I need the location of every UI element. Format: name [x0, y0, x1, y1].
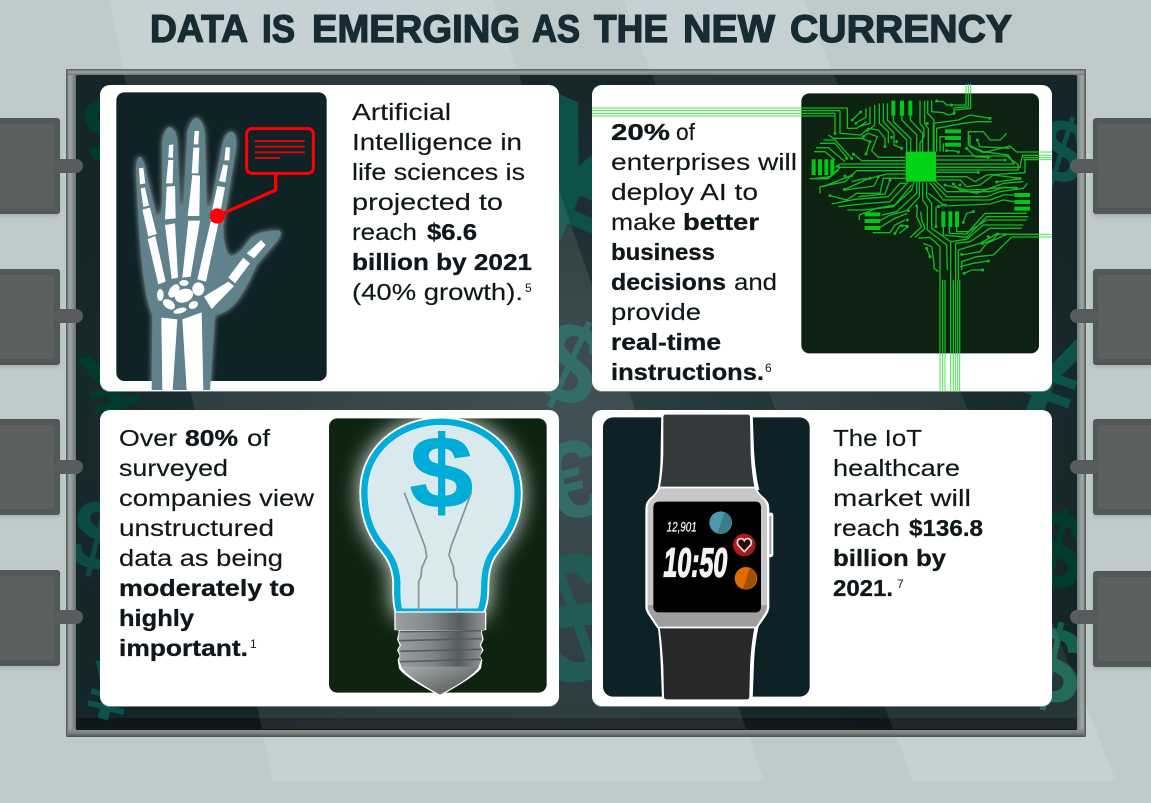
text: unstructured data: data as being [119, 545, 283, 571]
title: THE [594, 8, 668, 51]
text: AI in life sciences: (40% growth). [352, 279, 523, 305]
text: unstructured data: highly [119, 605, 194, 631]
dark board with currency symbols: $ [1009, 599, 1095, 732]
text: IoT healthcare: billion by [833, 545, 946, 571]
panel: IoT healthcare [592, 410, 1052, 707]
text: unstructured data: important. [119, 635, 248, 661]
panel: AI in life sciences [100, 85, 559, 392]
dark board with currency symbols: $ [514, 292, 626, 435]
text: IoT healthcare: 2021. [833, 575, 893, 601]
text: unstructured data: companies view [119, 485, 314, 511]
text: enterprises deploying AI: better [683, 209, 759, 235]
text: enterprises deploying AI: enterprises will [611, 149, 797, 175]
icon: circuit brain [592, 84, 1052, 392]
text: IoT healthcare [833, 425, 983, 601]
text: dollar sign: $ [410, 415, 473, 529]
dark board with currency symbols: $ [1022, 97, 1101, 207]
side tabs right [1093, 118, 1151, 669]
dark board with currency symbols: $ [489, 500, 661, 736]
panel: enterprises deploying AI [592, 84, 1052, 392]
connectors left [54, 159, 83, 624]
text: unstructured data: Over [119, 425, 177, 451]
text: enterprises deploying AI: of [676, 119, 696, 145]
text: AI in life sciences: reach [352, 219, 417, 245]
text: AI in life sciences [352, 99, 532, 305]
text: IoT healthcare: reach [833, 515, 900, 541]
title: NEW [683, 8, 775, 51]
text: AI in life sciences: Intelligence in [352, 129, 522, 155]
text: unstructured data: moderately to [119, 575, 295, 601]
text: unstructured data: surveyed [119, 455, 228, 481]
text: steps: 12,901 [667, 519, 697, 535]
text: enterprises deploying AI: deploy AI to [611, 179, 758, 205]
text: enterprises deploying AI: real-time [611, 329, 721, 355]
text: IoT healthcare: market will [833, 485, 971, 511]
text: enterprises deploying AI: make [611, 209, 676, 235]
dark board with currency symbols [57, 52, 1109, 741]
dark board with currency symbols: $ [73, 70, 151, 192]
text: AI in life sciences: projected to [352, 189, 503, 215]
text: unstructured data: 80% [185, 425, 238, 451]
dark board with currency symbols: € [528, 413, 617, 548]
text: unstructured data: unstructured [119, 515, 274, 541]
title: AS [532, 8, 580, 51]
text: unstructured data [119, 425, 314, 661]
text: AI in life sciences: life sciences is [352, 159, 525, 185]
text: enterprises deploying AI: 6 [765, 361, 772, 375]
text: unstructured data: of [247, 425, 271, 451]
title [150, 8, 1012, 51]
title: DATA [150, 8, 248, 51]
text: AI in life sciences: 5 [525, 281, 532, 295]
text: enterprises deploying AI: 20% [611, 119, 670, 145]
dark board with currency symbols: ¥ [71, 325, 154, 447]
icon: smart watch [603, 413, 810, 699]
text: unstructured data: 1 [250, 637, 257, 651]
title: EMERGING [312, 8, 520, 51]
text: time: 10:50 [663, 540, 728, 586]
dark board with currency symbols: $ [1011, 483, 1100, 618]
text: AI in life sciences: $6.6 [427, 219, 477, 245]
text: IoT healthcare: 7 [897, 577, 904, 591]
text: IoT healthcare: $136.8 [909, 515, 983, 541]
dark board with currency symbols: ¥ [77, 644, 143, 741]
connectors right [1070, 159, 1099, 624]
title: CURRENCY [790, 8, 1012, 51]
text: AI in life sciences: Artificial [352, 99, 451, 125]
metal frame [66, 69, 1086, 737]
icon: x-ray hand [116, 92, 327, 390]
text: enterprises deploying AI: and [734, 269, 777, 295]
text: enterprises deploying AI: business [611, 239, 715, 265]
dark board with currency symbols: ¥ [478, 52, 671, 301]
dark board with currency symbols: ¥ [991, 289, 1109, 451]
side tabs left [0, 118, 60, 668]
text: enterprises deploying AI: decisions [611, 269, 726, 295]
text: AI in life sciences: billion by 2021 [352, 249, 532, 275]
icon: light bulb with dollar sign [329, 415, 547, 696]
text: IoT healthcare: healthcare [833, 455, 960, 481]
text: enterprises deploying AI [611, 119, 797, 385]
text: enterprises deploying AI: instructions. [611, 359, 764, 385]
dark board with currency symbols: $ [57, 475, 138, 597]
panel: unstructured data [100, 410, 559, 707]
text: IoT healthcare: The IoT [833, 425, 922, 451]
title: IS [262, 8, 295, 51]
text: enterprises deploying AI: provide [611, 299, 701, 325]
